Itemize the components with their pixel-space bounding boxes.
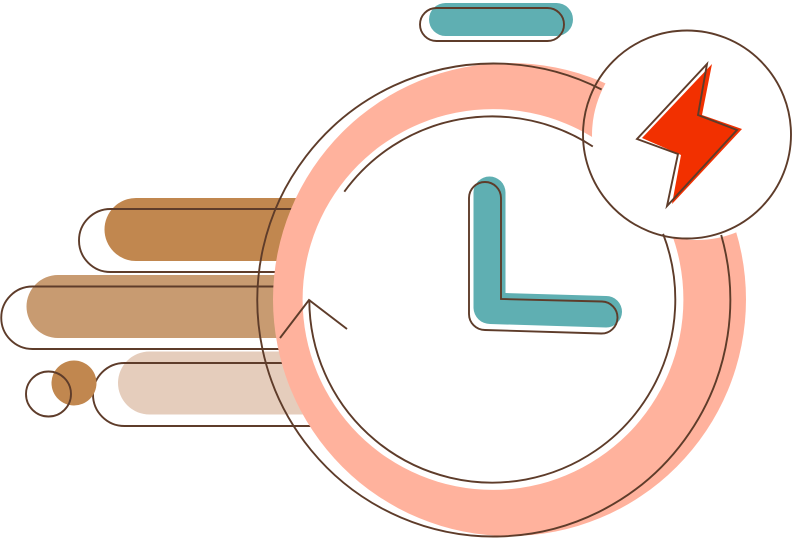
inner clock arc: top	[344, 116, 593, 192]
outer clock outline	[257, 64, 730, 537]
speed bar: middle	[1, 275, 320, 349]
speed bar: top	[79, 198, 320, 272]
arrowhead	[280, 300, 347, 338]
stopwatch top button	[420, 3, 573, 41]
badge circle outline	[583, 30, 791, 238]
white badge backing	[592, 30, 800, 240]
speed bar: bottom	[93, 352, 340, 426]
small dot	[26, 360, 96, 416]
inner clock arc: bottom with arrow	[309, 234, 675, 483]
salmon clock ring	[273, 63, 746, 536]
clock hands	[469, 176, 622, 334]
icon: lightning bolt	[637, 64, 742, 206]
clock face	[303, 109, 683, 490]
